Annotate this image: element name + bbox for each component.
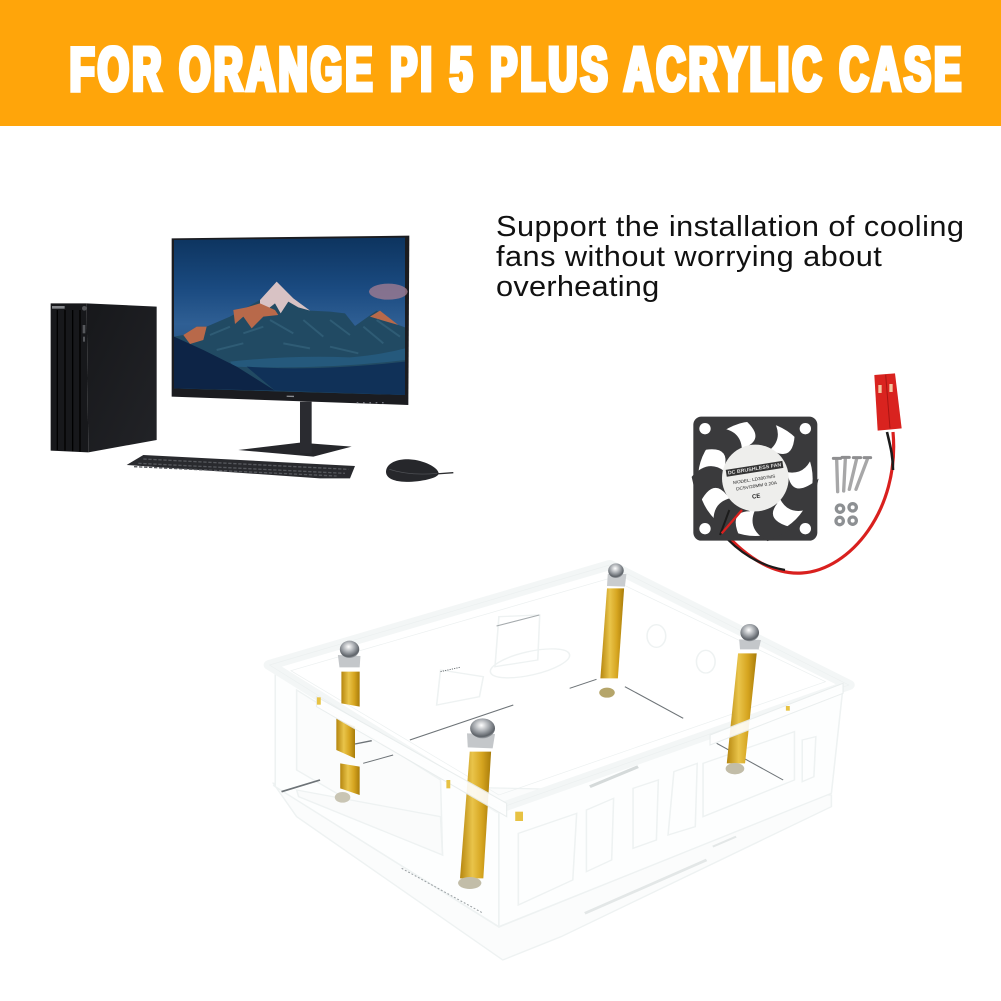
fan label bbox=[726, 461, 788, 504]
monitor bbox=[172, 236, 409, 457]
case inner edges bbox=[282, 615, 783, 913]
PC tower bbox=[51, 303, 157, 452]
standoff: right bbox=[726, 624, 761, 774]
text block: cooling fan support: Support the installation of cooling bbox=[496, 211, 964, 243]
banner bbox=[0, 0, 1001, 126]
standoff: back bbox=[599, 563, 626, 698]
yellow reflections bbox=[317, 697, 790, 821]
case bottom plate bbox=[273, 783, 831, 960]
case walls bbox=[275, 615, 843, 927]
standoff: left bbox=[335, 641, 360, 803]
text block: cooling fan support bbox=[496, 211, 964, 303]
screws bbox=[833, 457, 871, 492]
case top frame bbox=[269, 565, 849, 808]
fan label: MODEL: LD3007MS bbox=[733, 474, 776, 485]
monitor stand bbox=[238, 443, 352, 457]
fan label: CE bbox=[752, 493, 761, 501]
text block: cooling fan support: overheating bbox=[496, 271, 659, 303]
fan label: DC5V/20MM 0.20A bbox=[736, 480, 777, 491]
fan bbox=[690, 417, 819, 544]
cooling fan kit bbox=[690, 373, 902, 544]
acrylic case bbox=[269, 563, 849, 960]
red connector bbox=[874, 373, 902, 431]
text block: cooling fan support: fans without worrying about bbox=[496, 241, 883, 273]
wires from fan to connector bbox=[721, 432, 894, 573]
standoff: front bbox=[458, 718, 495, 889]
keyboard bbox=[127, 455, 355, 478]
nuts bbox=[836, 504, 856, 525]
title: FOR ORANGE PI 5 PLUS ACRYLIC CASE bbox=[70, 36, 961, 105]
frame crossing bars bbox=[317, 683, 843, 817]
mouse bbox=[386, 459, 453, 482]
desktop computer set bbox=[51, 236, 453, 482]
fan label: DC BRUSHLESS FAN bbox=[727, 462, 782, 477]
